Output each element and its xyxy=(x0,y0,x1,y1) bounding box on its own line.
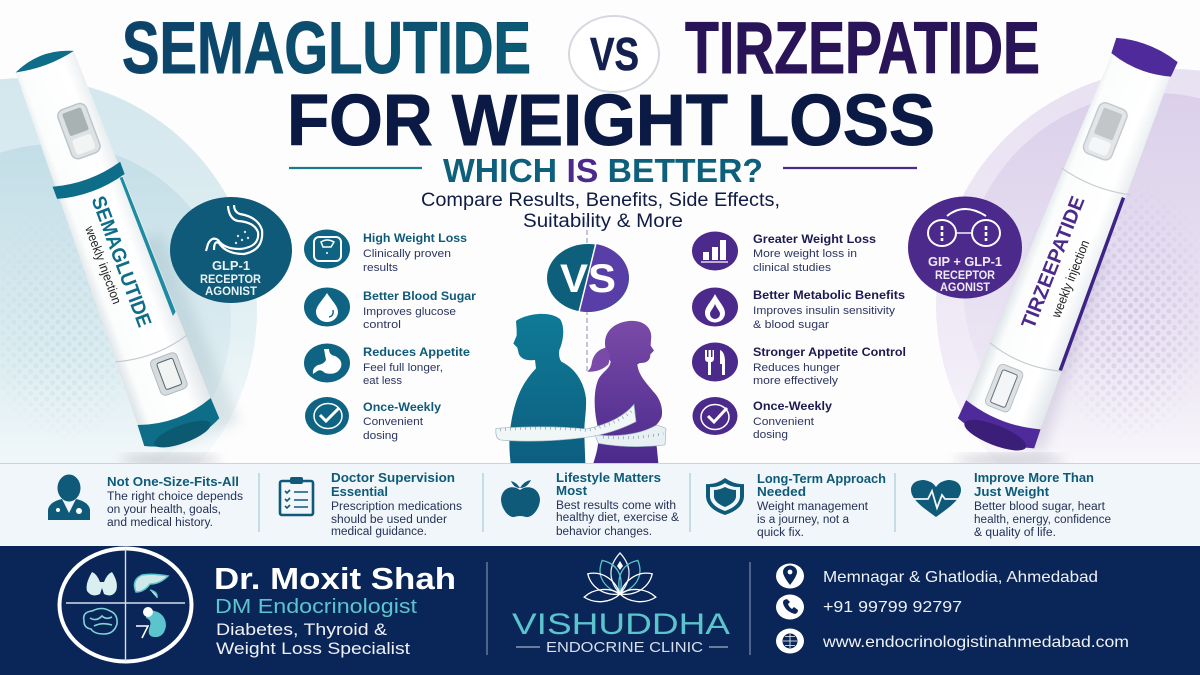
icon: lotus xyxy=(584,553,656,603)
benefit: high weight loss: Clinically proven xyxy=(363,248,451,260)
title: tirzepatide: TIRZEPATIDE xyxy=(685,8,1040,89)
icon: kidney xyxy=(146,610,166,637)
contact: website xyxy=(776,628,1129,654)
icon: doctor xyxy=(48,474,90,520)
doctor specialty: Diabetes, Thyroid & xyxy=(216,620,388,639)
icon: bar chart xyxy=(692,232,738,270)
benefit: reduces appetite: eat less xyxy=(363,375,403,387)
icon: blood drop xyxy=(304,288,350,326)
item: long-term approach needed: Needed xyxy=(757,485,806,499)
item: improve more than just weight: health, energy, confidence xyxy=(974,514,1111,526)
doctor specialty xyxy=(216,620,410,658)
benefit: reduces appetite xyxy=(363,347,470,387)
contact: phone: +91 99799 92797 xyxy=(823,599,962,616)
contact: address: Memnagar & Ghatlodia, Ahmedabad xyxy=(823,569,1098,586)
subtitle text: Suitability & More xyxy=(523,211,683,232)
item: not one-size-fits-all: and medical history. xyxy=(107,517,213,529)
item: lifestyle matters most: Most xyxy=(556,484,588,498)
pen label: tirzepatide: TIRZEEPATIDE xyxy=(1018,193,1089,332)
item: doctor supervision essential: Doctor Supervision xyxy=(331,471,455,485)
badge: glp-1 receptor agonist: GLP-1 xyxy=(212,259,250,273)
benefit: better blood sugar: control xyxy=(363,319,401,331)
item: doctor supervision essential: should be used under xyxy=(331,514,447,526)
icon: scale xyxy=(304,230,350,268)
benefit: better metabolic benefits: & blood sugar xyxy=(753,319,829,331)
panel: tirzepatide benefits xyxy=(692,232,906,441)
clinic logo: vishuddha: ENDOCRINE CLINIC xyxy=(546,640,703,656)
icon: heart with pulse xyxy=(911,480,961,517)
benefit: reduces appetite: Reduces Appetite xyxy=(363,347,470,359)
item: not one-size-fits-all xyxy=(107,475,243,529)
benefit: better blood sugar: Improves glucose xyxy=(363,306,456,318)
pen label: semaglutide: SEMAGLUTIDE xyxy=(87,193,155,330)
benefit: reduces appetite: Feel full longer, xyxy=(363,362,443,374)
vs emblem: VS xyxy=(560,257,616,301)
vs badge in title xyxy=(569,16,659,92)
tirzepatide pen xyxy=(953,30,1197,464)
center illustration: man and woman with measuring tape xyxy=(496,222,666,463)
item: improve more than just weight: Better blood sugar, heart xyxy=(974,501,1106,513)
benefit: better blood sugar xyxy=(363,291,477,331)
emblem: endocrine organs xyxy=(60,548,192,662)
item: improve more than just weight: Improve More Than xyxy=(974,471,1094,485)
item: long-term approach needed: Weight management xyxy=(757,501,869,513)
icon: apple xyxy=(501,480,540,517)
item: improve more than just weight xyxy=(974,471,1111,539)
footer panel xyxy=(0,546,1200,675)
benefit: once-weekly: Once-Weekly xyxy=(753,401,833,413)
icon: shield xyxy=(706,478,744,515)
clinic logo: vishuddha xyxy=(512,553,730,656)
benefit: once-weekly: Convenient xyxy=(363,416,423,428)
benefit: better metabolic benefits xyxy=(753,290,905,331)
panel: tirzepatide backdrop circles xyxy=(936,69,1200,450)
item: long-term approach needed: quick fix. xyxy=(757,527,804,539)
benefit: once-weekly: dosing xyxy=(363,430,398,442)
item: lifestyle matters most: behavior changes. xyxy=(556,526,652,538)
item: lifestyle matters most: Best results come with xyxy=(556,500,676,512)
benefit: once-weekly xyxy=(363,402,442,442)
item: long-term approach needed: Long-Term Approach xyxy=(757,472,886,486)
badge: gip + glp-1 receptor agonist xyxy=(908,196,1022,298)
icon: stomach xyxy=(206,205,262,254)
benefit: better metabolic benefits: Better Metabolic Benefits xyxy=(753,290,905,302)
clinic logo: vishuddha: VISHUDDHA xyxy=(512,608,730,641)
item: not one-size-fits-all: Not One-Size-Fits-All xyxy=(107,475,239,489)
doctor title: DM Endocrinologist xyxy=(215,596,418,618)
semaglutide pen xyxy=(5,35,240,456)
item: doctor supervision essential: Prescription medications xyxy=(331,501,462,513)
item: lifestyle matters most xyxy=(556,471,679,538)
benefit: high weight loss xyxy=(363,233,467,274)
icon: check xyxy=(305,397,349,435)
doctor name: Dr. Moxit Shah xyxy=(214,561,456,596)
doctor specialty: Weight Loss Specialist xyxy=(216,639,410,658)
contact: phone xyxy=(776,594,962,620)
icon: blood drop xyxy=(692,288,738,326)
benefit: stronger appetite control: Stronger Appetite Control xyxy=(753,347,906,359)
benefit: greater weight loss: Greater Weight Loss xyxy=(753,234,876,246)
measuring tape xyxy=(496,404,666,447)
item: doctor supervision essential: medical guidance. xyxy=(331,526,427,538)
benefit: better blood sugar: Better Blood Sugar xyxy=(363,291,477,303)
hair ponytail xyxy=(587,348,610,372)
subheading: which is better: WHICH IS BETTER? xyxy=(443,152,763,189)
item: improve more than just weight: Just Weight xyxy=(974,485,1050,499)
badge: gip + glp-1 receptor agonist: RECEPTOR xyxy=(935,268,995,282)
benefit: stronger appetite control: Reduces hunger xyxy=(753,362,840,374)
badge: gip + glp-1 receptor agonist: GIP + GLP-1 xyxy=(928,254,1002,269)
benefit: greater weight loss: More weight loss in xyxy=(753,248,857,260)
title: semaglutide: SEMAGLUTIDE xyxy=(122,8,531,89)
panel: key considerations strip xyxy=(0,463,1200,546)
subtitle text: Compare Results, Benefits, Side Effects, xyxy=(421,190,780,211)
vs emblem xyxy=(547,243,629,312)
contact: address xyxy=(776,564,1098,588)
pen label: weekly injection: weekly injection xyxy=(82,223,125,306)
item: lifestyle matters most: Lifestyle Matters xyxy=(556,471,661,485)
icon: stomach xyxy=(304,344,350,382)
badge: glp-1 receptor agonist: RECEPTOR xyxy=(200,272,261,286)
badge: glp-1 receptor agonist: AGONIST xyxy=(205,284,258,298)
icon: pancreas xyxy=(134,574,168,598)
icon: fork and knife xyxy=(692,342,738,382)
icon: check xyxy=(692,397,738,435)
title: for weight loss: FOR WEIGHT LOSS xyxy=(287,81,935,161)
panel: semaglutide backdrop circles xyxy=(0,78,257,463)
benefit: once-weekly: dosing xyxy=(753,429,788,441)
benefit: better metabolic benefits: Improves insulin sensitivity xyxy=(753,305,896,317)
vs badge in title: VS xyxy=(590,28,639,80)
icon: clipboard xyxy=(280,477,313,515)
benefit: once-weekly xyxy=(753,401,833,441)
icon: brain xyxy=(84,608,117,634)
item: doctor supervision essential xyxy=(331,471,462,538)
item: long-term approach needed: is a journey, not a xyxy=(757,514,850,526)
panel: semaglutide benefits xyxy=(304,230,477,442)
silhouette: woman xyxy=(593,321,662,463)
contact: website: www.endocrinologistinahmedabad.com xyxy=(822,634,1129,651)
benefit: stronger appetite control: more effectively xyxy=(753,375,839,387)
item: not one-size-fits-all: on your health, goals, xyxy=(107,504,221,516)
item: doctor supervision essential: Essential xyxy=(331,485,388,499)
item: lifestyle matters most: healthy diet, exercise & xyxy=(556,512,679,524)
benefit: once-weekly: Convenient xyxy=(753,416,814,428)
silhouette: man xyxy=(509,314,586,463)
pen ground shadows xyxy=(120,455,1065,465)
item: not one-size-fits-all: The right choice depends xyxy=(107,491,243,503)
icon: dual receptor xyxy=(928,209,1000,246)
benefit: high weight loss: High Weight Loss xyxy=(363,233,467,245)
icon: thyroid xyxy=(87,572,117,595)
benefit: stronger appetite control xyxy=(753,347,906,387)
badge: gip + glp-1 receptor agonist: AGONIST xyxy=(940,280,991,294)
item: improve more than just weight: & quality of life. xyxy=(974,527,1056,539)
pen label: weekly injection: weekly injection xyxy=(1048,238,1092,321)
badge: glp-1 receptor agonist xyxy=(170,197,292,303)
benefit: greater weight loss xyxy=(753,234,876,274)
subtitle text xyxy=(421,190,780,232)
benefit: high weight loss: results xyxy=(363,262,399,274)
benefit: greater weight loss: clinical studies xyxy=(753,262,832,274)
item: long-term approach needed xyxy=(757,472,886,539)
benefit: once-weekly: Once-Weekly xyxy=(363,402,442,414)
